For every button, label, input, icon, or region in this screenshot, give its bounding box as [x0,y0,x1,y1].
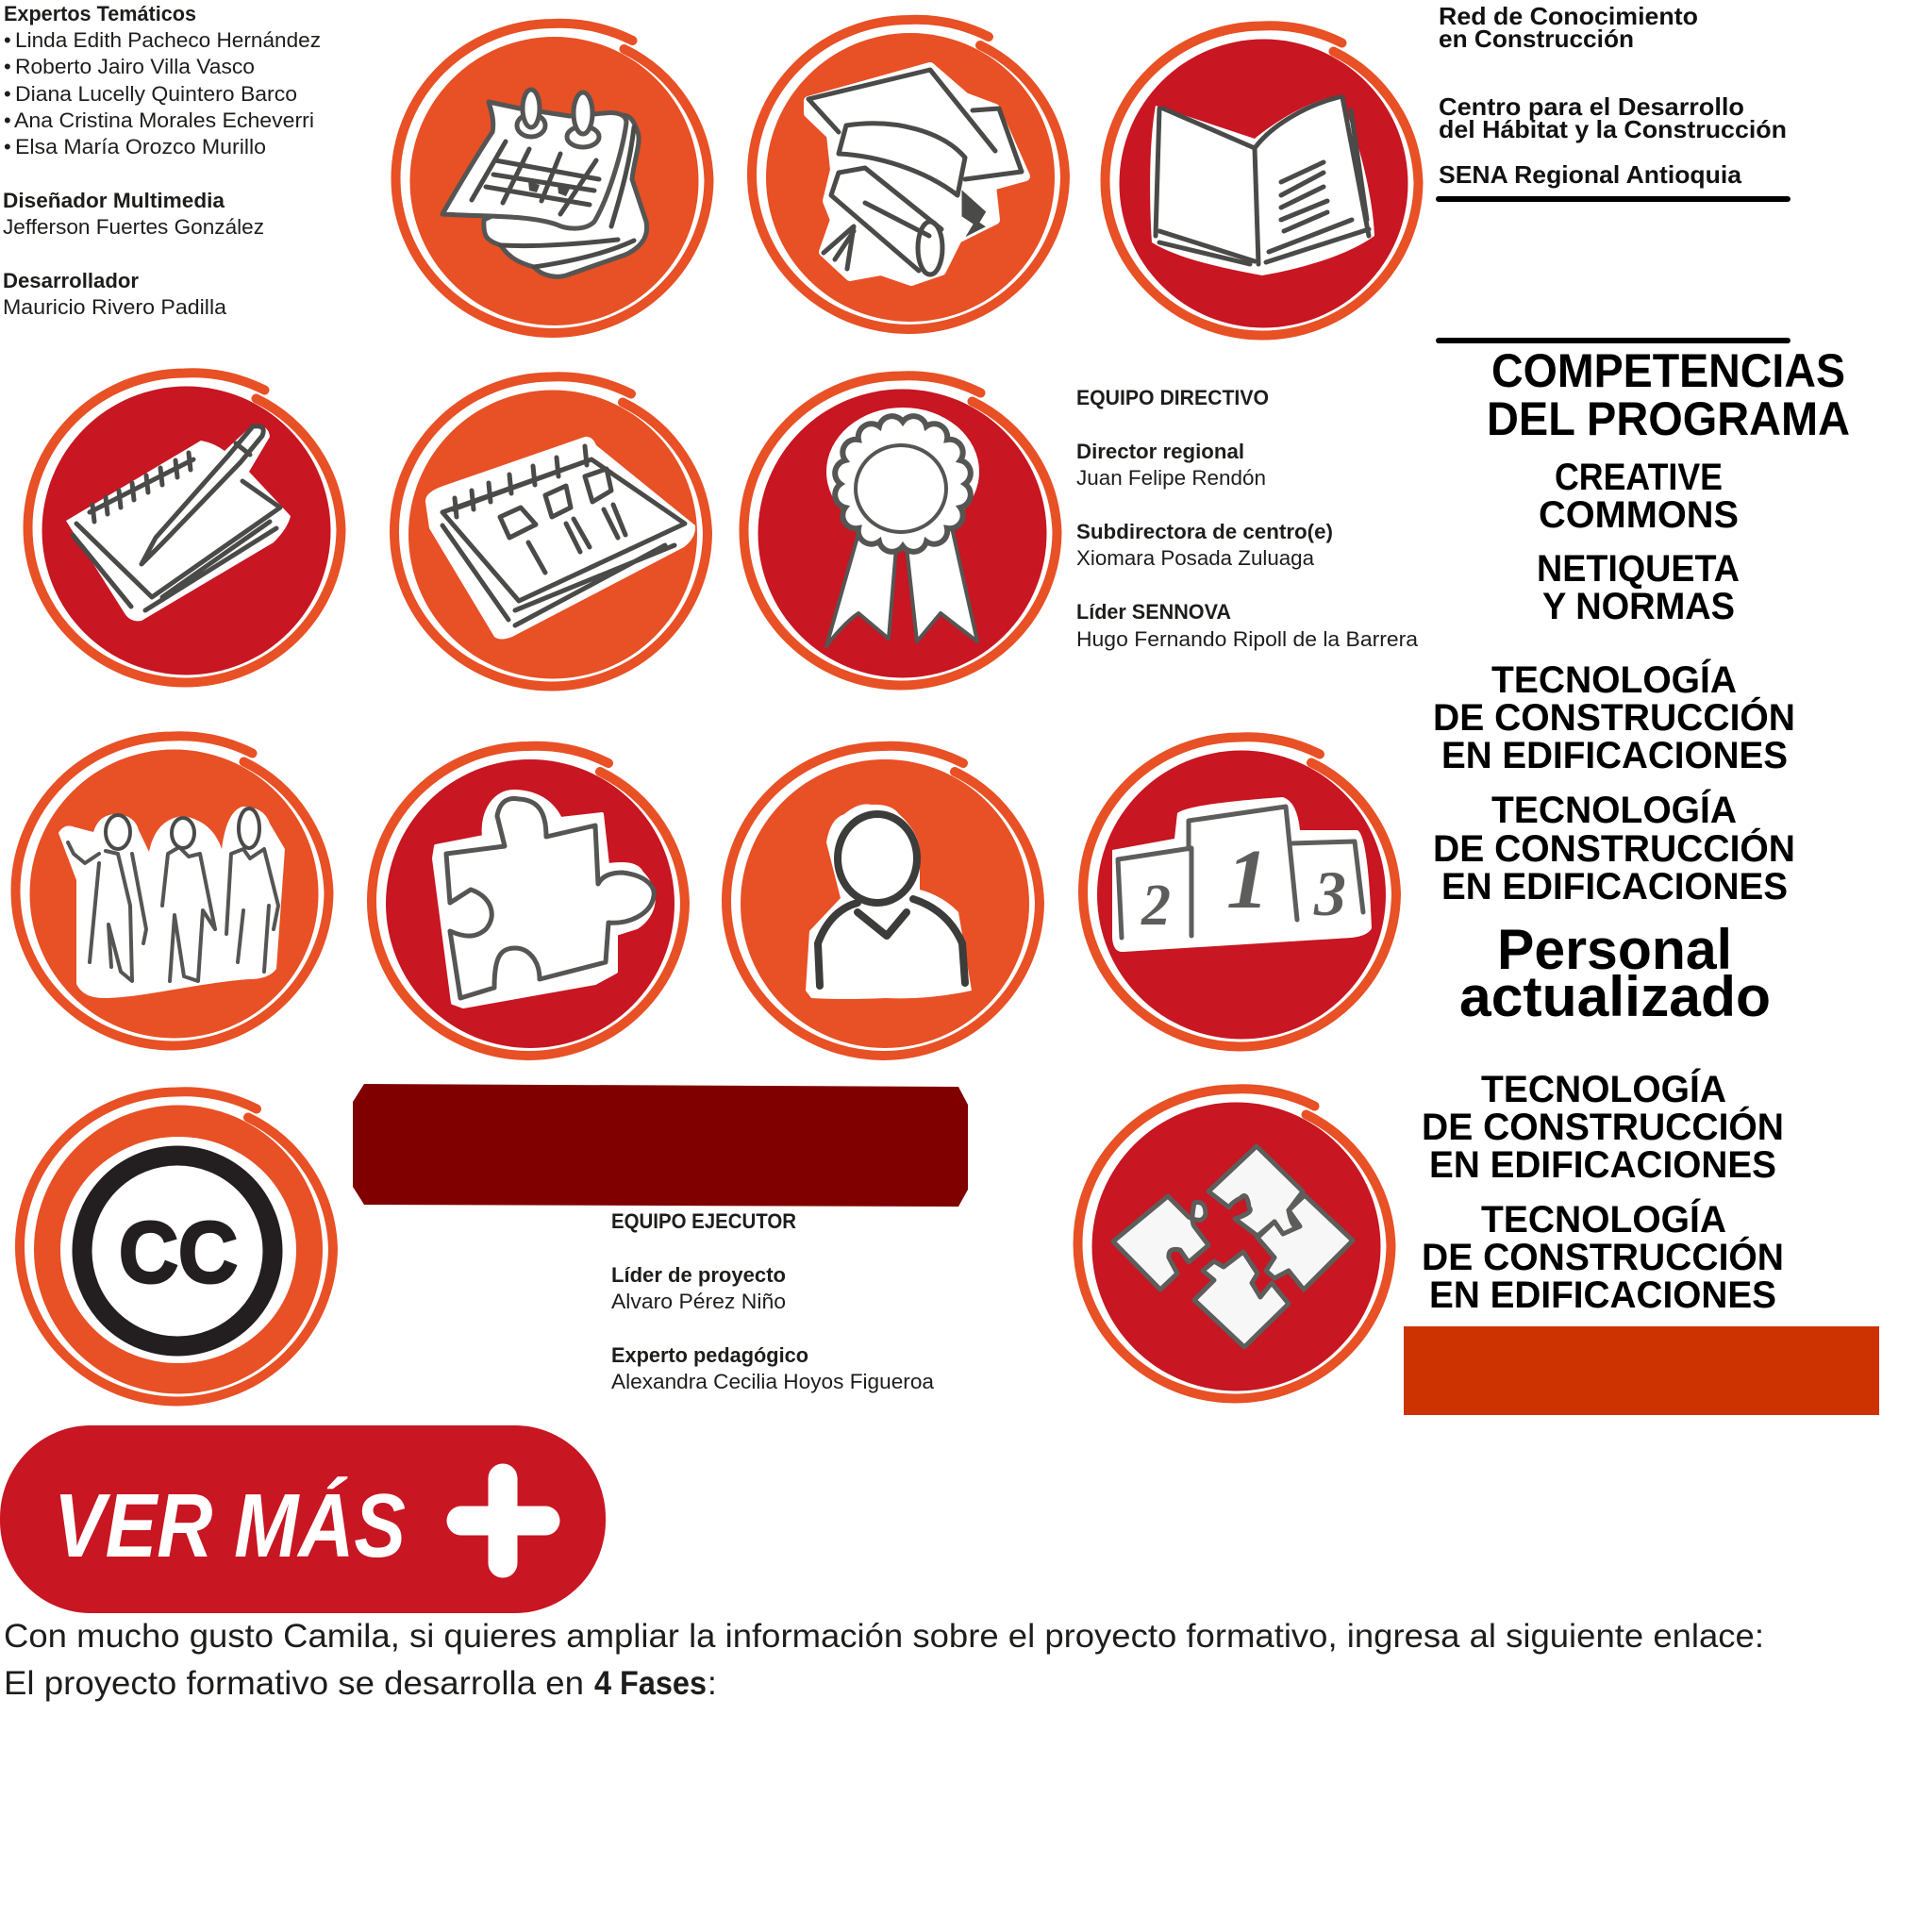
text block: equipo ejecutor: Alexandra Cecilia Hoyos Figueroa [611,1370,935,1393]
text block: expertos temáticos and credits: Diseñador Multimedia [3,189,225,212]
text block: equipo directivo: EQUIPO DIRECTIVO [1076,386,1269,409]
text block: red de conocimiento heading: en Construcción [1439,25,1634,53]
icon: podium badge: 1 [1226,833,1269,926]
text block: enlace paragraph: Con mucho gusto Camila, si quieres ampliar la información sobre el proyecto formativo, ingresa al siguiente enlace: [4,1618,1764,1655]
icon: creative commons badge: CC [119,1205,238,1301]
text block: expertos temáticos and credits: • [4,135,11,158]
text block: enlace paragraph: 4 Fases [594,1665,707,1702]
button: ver más [0,1425,606,1613]
text block: red de conocimiento heading: Red de Conocimiento [1439,2,1698,30]
text block: red de conocimiento heading: del Hábitat y la Construcción [1439,115,1787,143]
text block: tecnología de construcción, second group: DE CONSTRUCCIÓN [1422,1105,1784,1148]
text block: expertos temáticos and credits: Jefferson Fuertes González [3,215,264,239]
text block: tecnología de construcción, first column group: DE CONSTRUCCIÓN [1433,826,1795,870]
icon: spiral calendar notebook badge [394,376,708,687]
text block: expertos temáticos and credits: Desarrollador [3,269,139,292]
icon: award ribbon badge [743,375,1057,685]
text block: equipo directivo: Director regional [1076,440,1244,463]
text block: equipo ejecutor: Líder de proyecto [611,1263,786,1287]
text block: personal actualizado [1459,918,1771,1028]
text block: equipo directivo: Hugo Fernando Ripoll de la Barrera [1076,627,1419,651]
button: ver más: VER MÁS [54,1475,406,1576]
text block: tecnología de construcción, second group: DE CONSTRUCCIÓN [1422,1235,1784,1278]
icon: person badge [726,746,1040,1056]
text block: tecnología de construcción, second group: TECNOLOGÍA [1481,1198,1726,1241]
text block: tecnología de construcción, first column group: TECNOLOGÍA [1491,658,1737,701]
text block: equipo ejecutor: EQUIPO EJECUTOR [611,1209,796,1233]
text block: equipo directivo [1076,386,1419,651]
text block: expertos temáticos and credits: Linda Edith Pacheco Hernández [15,28,321,52]
text block: creative commons and netiqueta: COMMONS [1539,494,1739,536]
text block: equipo ejecutor: Alvaro Pérez Niño [611,1290,786,1313]
heading: competencias del programa [1487,344,1850,445]
text block: personal actualizado: Personal [1497,918,1732,981]
text block: creative commons and netiqueta: Y NORMAS [1542,586,1735,627]
icon: calendar badge [396,24,709,333]
text block: enlace paragraph [4,1618,1764,1702]
text block: expertos temáticos and credits: • [4,108,11,132]
text block: equipo ejecutor [611,1209,935,1393]
text block: red de conocimiento heading [1439,2,1787,189]
text block: equipo ejecutor: Experto pedagógico [611,1343,808,1367]
heading: competencias del programa: COMPETENCIAS [1491,344,1845,397]
text block: tecnología de construcción, first column group: EN EDIFICACIONES [1441,735,1788,776]
text block: equipo directivo: Subdirectora de centro(e) [1076,520,1333,543]
text block: expertos temáticos and credits: • [4,55,11,78]
text block: equipo directivo: Líder SENNOVA [1076,600,1231,624]
text block: personal actualizado: actualizado [1459,965,1771,1028]
text block: red de conocimiento heading: Centro para el Desarrollo [1439,92,1744,121]
text block: tecnología de construcción, second group: TECNOLOGÍA [1481,1068,1726,1110]
icon: puzzle piece badge [372,746,685,1056]
text block: expertos temáticos and credits: Expertos Temáticos [4,2,196,25]
text block: creative commons and netiqueta: CREATIVE [1555,457,1723,498]
text block: tecnología de construcción, second group: EN EDIFICACIONES [1429,1274,1776,1316]
text block: tecnología de construcción, first column group [1433,658,1795,908]
icon: group of people badge [15,736,328,1045]
icon: four puzzle pieces badge [1077,1089,1391,1399]
heading: competencias del programa: DEL PROGRAMA [1487,392,1850,445]
text block: expertos temáticos and credits: Mauricio Rivero Padilla [3,295,227,319]
banner: orange-red block [1404,1326,1879,1415]
text block: tecnología de construcción, first column group: TECNOLOGÍA [1491,789,1737,831]
text block: expertos temáticos and credits: Elsa María Orozco Murillo [15,135,266,158]
text block: enlace paragraph: : [708,1665,717,1702]
icon: creative commons badge [20,1091,333,1402]
icon: plus sign [461,1478,545,1563]
text block: expertos temáticos and credits: • [4,28,11,52]
text block: tecnología de construcción, second group [1422,1068,1784,1316]
text block: equipo directivo: Xiomara Posada Zuluaga [1076,546,1315,570]
text block: expertos temáticos and credits: Diana Lucelly Quintero Barco [15,82,297,106]
text block: expertos temáticos and credits: • [4,82,11,106]
icon: graduation cap and diploma badge [752,20,1065,329]
text block: tecnología de construcción, first column group: EN EDIFICACIONES [1441,866,1788,908]
icon: podium badge: 2 [1141,874,1171,938]
text block: expertos temáticos and credits: Ana Cristina Morales Echeverri [14,108,314,132]
text block: equipo directivo: Juan Felipe Rendón [1076,466,1266,490]
text block: tecnología de construcción, second group: EN EDIFICACIONES [1429,1144,1776,1186]
text block: creative commons and netiqueta [1537,457,1740,627]
text block: enlace paragraph: El proyecto formativo se desarrolla en [4,1665,584,1702]
text block: expertos temáticos and credits: Roberto Jairo Villa Vasco [15,55,255,78]
icon: notepad and pencil badge [28,373,341,683]
text block: tecnología de construcción, first column group: DE CONSTRUCCIÓN [1433,695,1795,739]
icon: open book badge [1106,25,1419,336]
icon: podium badge [1083,737,1396,1047]
icon: podium badge: 3 [1313,858,1346,929]
text block: creative commons and netiqueta: NETIQUETA [1537,548,1740,590]
banner: dark red block [353,1084,968,1207]
text block: expertos temáticos and credits [3,2,321,319]
text block: red de conocimiento heading: SENA Regional Antioquia [1439,160,1742,189]
